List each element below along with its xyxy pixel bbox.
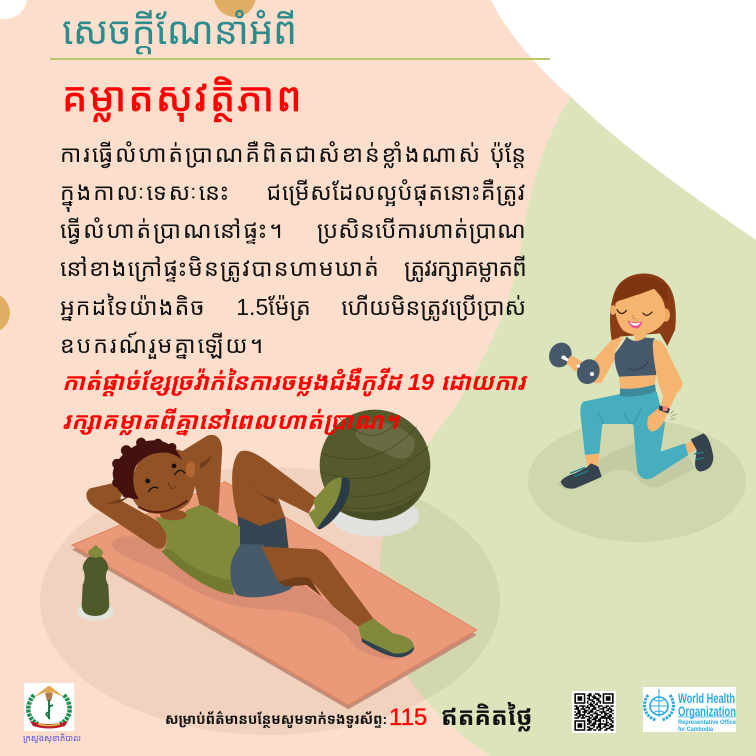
mat (72, 482, 477, 709)
ministry of health logo (23, 683, 81, 744)
hair back (610, 274, 676, 346)
pants (580, 392, 697, 479)
body text: អ្នកដទៃយ៉ាងតិច 1.5ម៉ែត្រ ហើយមិនត្រូវប្រើប្រាស់ (60, 294, 526, 320)
torso (615, 332, 658, 397)
title rule (50, 58, 550, 60)
red italic message (62, 368, 528, 436)
footer hotline text (165, 702, 533, 732)
body text: ក្នុងកាលៈទេសៈនេះ ជម្រើសដែលល្អបំផុតនោះគឺត្រូវ (60, 179, 526, 205)
head (610, 276, 670, 335)
red italic message: កាត់ផ្តាច់ខ្សែច្រវ៉ាក់នៃការចម្លងជំងឺកូវីដ 19 ដោយការ (62, 369, 525, 395)
footer hotline text: សម្រាប់ព័ត៌មានបន្ថែមសូមទាក់ទងទូរស័ព្ទ: (165, 711, 387, 727)
water bottle (77, 545, 114, 621)
toll free: ឥតគិតថ្លៃ (441, 704, 533, 731)
body text (60, 140, 526, 360)
red italic message: រក្សាគម្លាតពីគ្នានៅពេលហាត់ប្រាណ។ (62, 408, 399, 434)
body text: ធ្វើលំហាត់ប្រាណនៅផ្ទះ។ ប្រសិនបើការហាត់ប្រាណ (60, 217, 526, 243)
title: safety distance: គម្លាតសុវត្ថិភាព (62, 76, 304, 120)
QR code (572, 691, 616, 733)
heading: guidance: សេចក្តីណែនាំអំពី (62, 11, 297, 53)
shoes (561, 433, 713, 489)
body text: នៅខាងក្រៅផ្ទះមិនត្រូវបានហាមឃាត់ ត្រូវរក្សាគម្លាតពី (60, 255, 526, 281)
exercise ball (320, 410, 430, 537)
dumbbell and left arm (545, 337, 623, 388)
man figure (86, 435, 414, 657)
body text: ការធ្វើលំហាត់ប្រាណគឺពិតជាសំខាន់ខ្លាំងណាស់ ប៉ុន្តែ (60, 141, 526, 167)
ministry name: ក្រសួងសុខាភិបាល (23, 733, 81, 743)
floor shadow (557, 443, 695, 490)
right arm and watch (647, 340, 682, 432)
hotline number: 115 (389, 704, 427, 731)
WHO logo (643, 687, 736, 732)
body text: ឧបករណ៍រួមគ្នាឡើយ។ (60, 332, 265, 358)
